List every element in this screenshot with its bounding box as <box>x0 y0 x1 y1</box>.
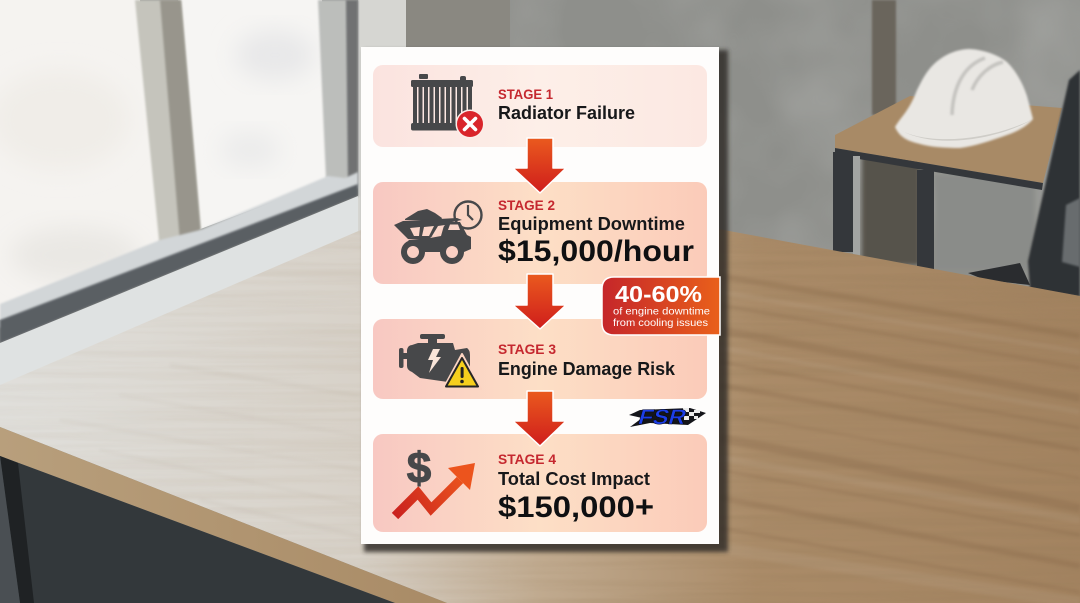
poster: cost stages <box>361 47 720 544</box>
window <box>0 0 358 390</box>
stage 4 label: STAGE 4 <box>498 452 556 467</box>
logo: FSR checkered flag: FSR <box>636 405 690 429</box>
hard hat <box>895 49 1033 148</box>
arrow: stage 3 to 4 <box>513 391 566 446</box>
desk <box>0 230 1080 603</box>
stage 2 label: STAGE 2 <box>498 198 555 213</box>
callout caption <box>613 306 710 329</box>
panel: stage 4 <box>373 434 707 532</box>
panel: stage 1 <box>373 65 707 147</box>
stage 4 value: $150,000+ <box>498 491 654 524</box>
panel: stage 3 <box>373 319 707 399</box>
concrete wall <box>0 0 1080 320</box>
stage 3 label: STAGE 3 <box>498 342 556 357</box>
callout: 40-60% of engine downtime <box>602 277 720 335</box>
arrow: stage 2 to 3 <box>513 274 566 329</box>
arrow: stage 1 to 2 <box>513 138 566 193</box>
logo: FSR checkered flag <box>629 405 706 429</box>
office chair <box>968 70 1080 297</box>
callout figure: 40-60% <box>615 281 702 307</box>
stage 1 title: Radiator Failure <box>498 102 635 123</box>
icon: dollar sign with rising arrow: $ <box>407 444 431 493</box>
icon: dump truck with clock <box>394 202 482 264</box>
stage 4 title: Total Cost Impact <box>498 468 650 489</box>
icon: radiator with red x <box>411 74 484 138</box>
poster shadow <box>364 50 728 552</box>
callout caption: from cooling issues <box>613 317 708 329</box>
shelf table <box>833 96 1062 270</box>
callout caption: of engine downtime <box>613 306 710 318</box>
icon: dollar sign with rising arrow <box>395 444 475 516</box>
stage 3 title: Engine Damage Risk <box>498 358 676 379</box>
stage 2 value: $15,000/hour <box>498 235 694 268</box>
poster sheet <box>361 47 719 544</box>
panel: stage 2 <box>373 182 707 284</box>
stage 2 title: Equipment Downtime <box>498 213 685 234</box>
stage 1 label: STAGE 1 <box>498 87 553 102</box>
icon: engine with warning <box>399 334 481 389</box>
